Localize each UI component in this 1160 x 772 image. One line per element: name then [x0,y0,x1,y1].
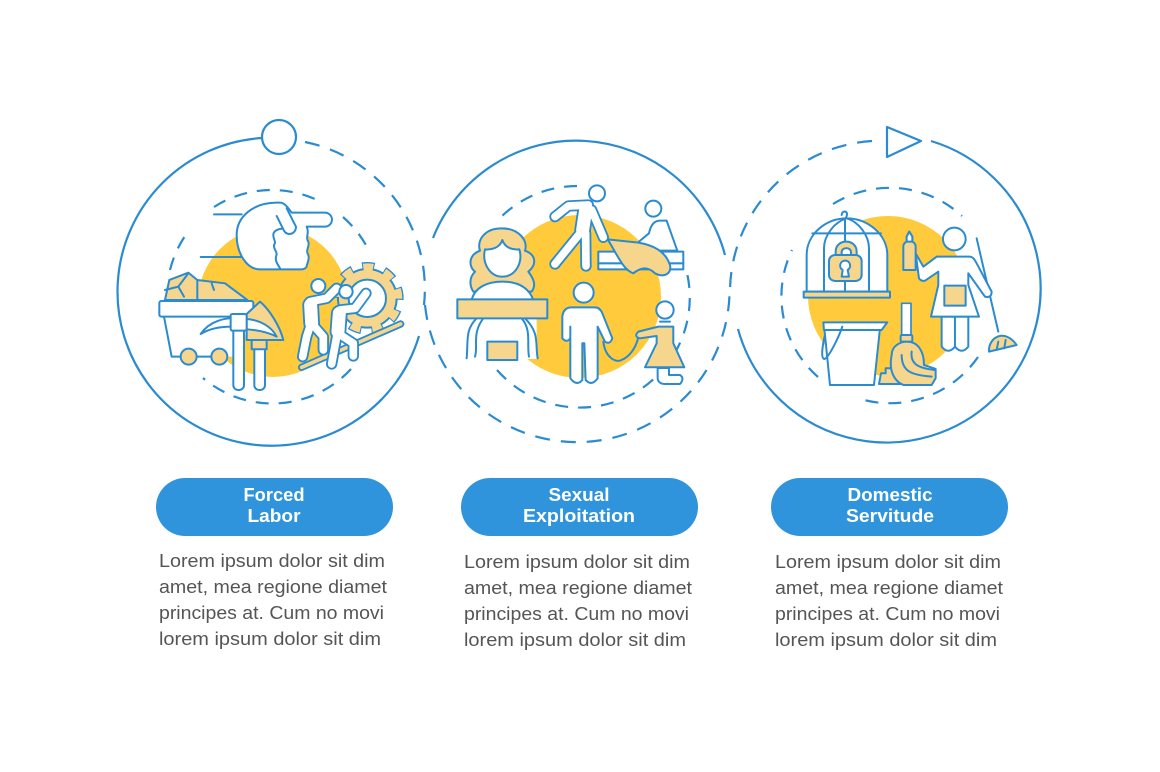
icon: workers on ramp [302,279,401,367]
icon: birdcage with padlock [804,211,890,298]
text block: forced labor [159,550,387,649]
text block: forced labor: principes at. Cum no movi [159,602,384,623]
heading pill: forced labor [156,478,393,536]
text block: domestic servitude [775,551,1003,650]
panel: forced labor [118,120,425,446]
inner dashed ring [781,188,978,403]
text block: sexual exploitation [464,551,692,650]
text block: forced labor: amet, mea regione diamet [159,576,387,597]
heading pill: sexual exploitation: Exploitation [523,505,635,526]
icon: mop [879,303,936,385]
text block: sexual exploitation: Lorem ipsum dolor sit dim [464,551,690,572]
yellow backdrop circle [198,227,348,377]
end marker triangle [887,127,921,157]
icon: maid with bottle and broom [903,228,1017,352]
heading pill: domestic servitude: Servitude [846,505,934,526]
icon: falling figure [555,185,605,266]
outer ring [730,141,1041,442]
heading pill: domestic servitude: Domestic [848,484,932,505]
text block: forced labor: Lorem ipsum dolor sit dim [159,550,385,571]
text block: domestic servitude: Lorem ipsum dolor sit dim [775,551,1001,572]
start marker circle [262,120,296,154]
outer ring [425,141,730,442]
text block: sexual exploitation: principes at. Cum no movi [464,603,689,624]
panel: sexual exploitation [425,141,730,442]
panel: domestic servitude [730,127,1041,442]
heading pill: sexual exploitation: Sexual [548,484,610,505]
icon: pointing hand [201,203,332,269]
text block: sexual exploitation: amet, mea regione diamet [464,577,692,598]
inner dashed ring [170,190,367,403]
heading pill: forced labor: Forced [244,484,304,505]
outer ring [118,138,425,446]
inner dashed ring [497,186,690,408]
heading pill: domestic servitude [771,478,1008,536]
icon: bucket [822,322,887,385]
text block: domestic servitude: principes at. Cum no movi [775,603,1000,624]
icon: gear [327,258,408,339]
icon: mine cart with ore [159,273,253,365]
heading pill: forced labor: Labor [248,505,300,526]
text block: sexual exploitation: lorem ipsum dolor sit dim [464,629,686,650]
icon: pickaxe and hammer [201,302,283,390]
icon: man with leash and kneeling girl [562,283,684,384]
yellow backdrop circle [498,215,661,378]
icon: figure on bed with sheet [598,201,683,275]
text block: domestic servitude: lorem ipsum dolor sit dim [775,629,997,650]
yellow backdrop circle [808,216,968,376]
heading pill: sexual exploitation [461,478,698,536]
icon: woman behind desk [457,228,547,360]
text block: forced labor: lorem ipsum dolor sit dim [159,628,381,649]
text block: domestic servitude: amet, mea regione diamet [775,577,1003,598]
